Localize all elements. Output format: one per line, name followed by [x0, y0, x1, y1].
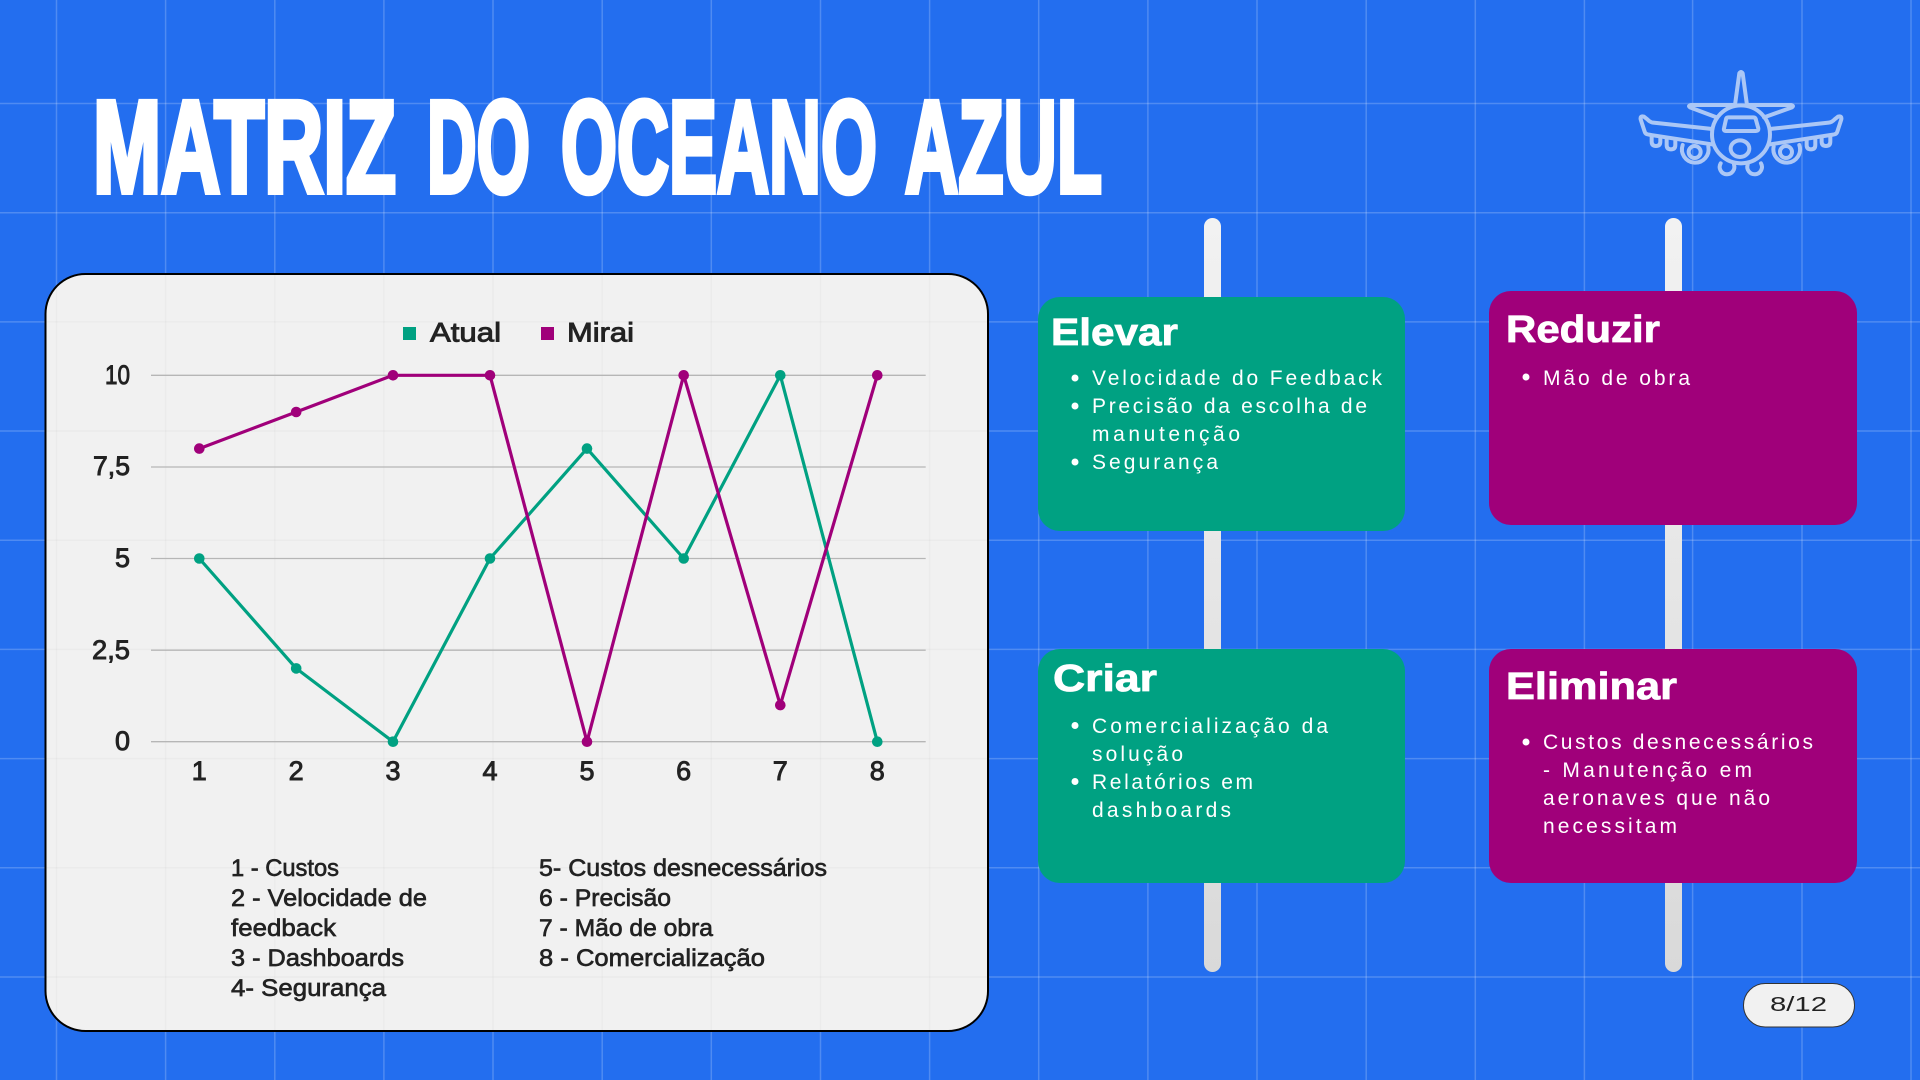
line chart: 4: [482, 756, 498, 786]
criteria key: left column: 2 - Velocidade de: [231, 885, 427, 912]
title: DO: [427, 73, 530, 220]
line chart: 0: [115, 726, 130, 756]
line chart: 7,5: [93, 451, 130, 481]
criteria key: left column: 4- Segurança: [231, 975, 387, 1002]
title: AZUL: [905, 73, 1102, 220]
icon: airplane: [1641, 72, 1841, 174]
criteria key: right column: 5- Custos desnecessários: [539, 855, 827, 882]
list: Elevar items: Segurança: [1092, 451, 1218, 474]
list: Criar items: solução: [1092, 743, 1183, 766]
line chart: 2,5: [92, 635, 130, 665]
list: Eliminar items: aeronaves que não: [1543, 787, 1770, 810]
chart legend: Mirai: [567, 318, 634, 348]
list: Elevar items: [1072, 367, 1382, 474]
criteria key: left column: feedback: [231, 915, 337, 942]
list: Eliminar items: necessitam: [1543, 815, 1677, 838]
heading: Reduzir: Reduzir: [1506, 309, 1660, 351]
line chart: 1: [192, 756, 207, 786]
list: Elevar items: Velocidade do Feedback: [1092, 367, 1382, 390]
list: Elevar items: manutenção: [1092, 423, 1240, 446]
list: Criar items: Comercialização da: [1092, 715, 1328, 738]
panel: Reduzir: [1489, 291, 1857, 525]
panel: Criar: [1038, 649, 1405, 883]
criteria key: left column: 3 - Dashboards: [231, 945, 404, 972]
panel: Eliminar: [1489, 649, 1857, 883]
heading: Eliminar: Eliminar: [1506, 666, 1677, 708]
page number pill: 8/12: [1770, 994, 1827, 1016]
chart legend: Atual: [430, 318, 501, 348]
line chart: 8: [870, 756, 885, 786]
series: Mirai: [194, 370, 883, 747]
criteria key: right column: 8 - Comercialização: [539, 945, 765, 972]
list: Elevar items: Precisão da escolha de: [1092, 395, 1367, 418]
panel: chart card: [46, 274, 988, 1031]
list: Reduzir items: Mão de obra: [1543, 367, 1690, 390]
line chart: 3: [385, 756, 401, 786]
line chart: 6: [676, 756, 691, 786]
line chart: 10: [105, 360, 130, 390]
line chart: 7: [773, 756, 788, 786]
line chart: 5: [115, 543, 130, 573]
title: OCEANO: [561, 73, 877, 220]
criteria key: right column: 6 - Precisão: [539, 885, 671, 912]
line chart: 2: [289, 756, 304, 786]
chart legend: [403, 318, 634, 348]
list: Criar items: Relatórios em: [1092, 771, 1253, 794]
line chart: 5: [579, 756, 595, 786]
criteria key: left column: [231, 855, 427, 1002]
list: Eliminar items: [1522, 731, 1813, 838]
line chart: [92, 360, 926, 786]
criteria key: left column: 1 - Custos: [231, 855, 339, 882]
panel: Elevar: [1038, 297, 1405, 531]
title: MATRIZ: [93, 73, 396, 220]
heading: Elevar: Elevar: [1051, 312, 1178, 354]
list: Eliminar items: Custos desnecessários: [1543, 731, 1813, 754]
criteria key: right column: [539, 855, 827, 972]
list: Criar items: [1072, 715, 1328, 822]
vertical post: left: [1204, 218, 1221, 972]
list: Eliminar items: - Manutenção em: [1543, 759, 1752, 782]
vertical post: right: [1665, 218, 1682, 972]
list: Criar items: dashboards: [1092, 799, 1231, 822]
criteria key: right column: 7 - Mão de obra: [539, 915, 714, 942]
heading: Criar: Criar: [1053, 658, 1157, 700]
title: [93, 73, 1102, 220]
series: Atual: [194, 370, 883, 747]
page number pill: [1744, 984, 1854, 1027]
